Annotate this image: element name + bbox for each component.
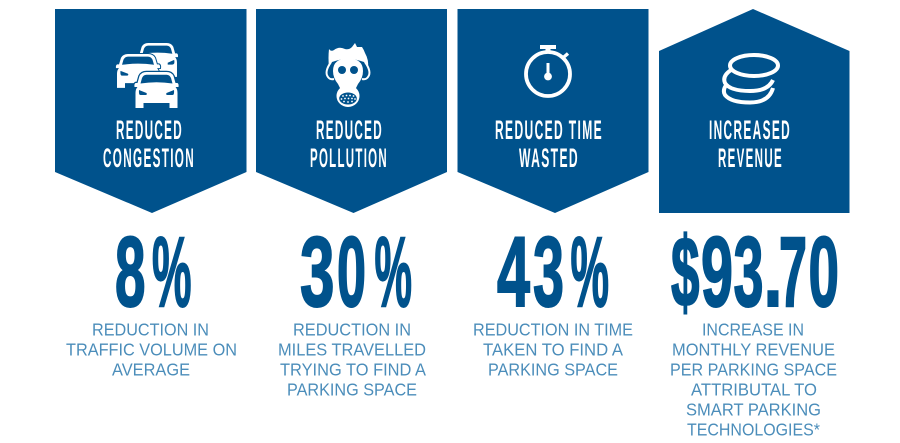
- panel: increased revenue: REVENUE: [718, 143, 783, 173]
- banner shape: [55, 9, 246, 213]
- description: REDUCTION IN TIME: [473, 320, 633, 340]
- banner shape: [659, 9, 850, 213]
- panel: reduced time wasted: %: [570, 216, 609, 327]
- description: [473, 320, 633, 380]
- description: TRAFFIC VOLUME ON: [66, 340, 237, 360]
- panel: reduced congestion: %: [152, 216, 192, 327]
- panel: increased revenue: [659, 9, 850, 440]
- description: [670, 320, 837, 440]
- icon: gas mask: [327, 43, 369, 107]
- icon: coins: [724, 55, 778, 102]
- icon: stopwatch: [526, 45, 570, 96]
- panel: reduced pollution: [256, 9, 447, 400]
- description: MILES TRAVELLED: [278, 340, 426, 360]
- description: MONTHLY REVENUE: [672, 340, 835, 360]
- description: REDUCTION IN: [92, 320, 209, 340]
- panel: reduced time wasted: [458, 9, 648, 380]
- banner shape: [256, 9, 447, 213]
- panel: reduced pollution: REDUCED: [316, 115, 383, 145]
- big number: 3: [533, 216, 564, 327]
- banner shape: [458, 9, 648, 213]
- description: PARKING SPACE: [488, 360, 618, 380]
- description: [278, 320, 426, 400]
- panel: reduced congestion: CONGESTION: [103, 143, 195, 173]
- description: [66, 320, 237, 380]
- description: TRYING TO FIND A: [280, 360, 426, 380]
- description: TAKEN TO FIND A: [483, 340, 623, 360]
- panel: reduced time wasted: REDUCED TIME: [495, 115, 603, 145]
- heading: [310, 115, 388, 173]
- big number: 3: [734, 216, 764, 327]
- description: AVERAGE: [112, 360, 190, 380]
- heading: WASTED: [519, 143, 579, 173]
- heading: [495, 115, 603, 173]
- big number: 7: [779, 216, 807, 327]
- description: TECHNOLOGIES*: [687, 420, 820, 440]
- big number: $: [671, 216, 700, 327]
- heading: [709, 115, 791, 173]
- big number: .: [764, 216, 782, 327]
- description: PARKING SPACE: [287, 380, 417, 400]
- big number: 8: [115, 216, 146, 327]
- big number: 4: [497, 216, 530, 327]
- heading: REDUCED: [116, 115, 183, 145]
- icon: traffic cars: [116, 43, 179, 108]
- description: ATTRIBUTAL TO: [691, 380, 817, 400]
- panel: increased revenue: INCREASED: [709, 115, 791, 145]
- description: PER PARKING SPACE: [670, 360, 837, 380]
- heading: [103, 115, 195, 173]
- description: INCREASE IN: [702, 320, 804, 340]
- description: REDUCTION IN: [293, 320, 411, 340]
- big number: 9: [701, 216, 733, 327]
- panel: reduced congestion: [55, 9, 246, 380]
- big number: 0: [808, 216, 839, 327]
- big number: 3: [300, 216, 334, 327]
- big number: 0: [337, 216, 366, 327]
- description: SMART PARKING: [686, 400, 821, 420]
- panel: reduced pollution: %: [374, 216, 412, 327]
- panel: reduced pollution: POLLUTION: [310, 143, 388, 173]
